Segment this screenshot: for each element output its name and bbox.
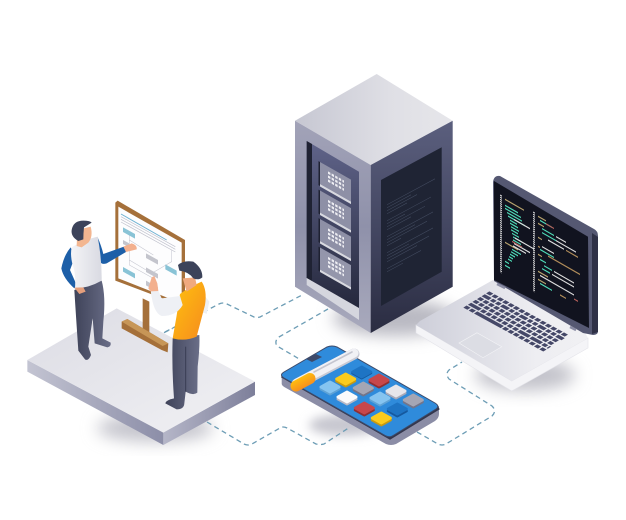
laptop lid (493, 176, 598, 335)
left person legs (74, 281, 111, 360)
right person hand (148, 276, 158, 291)
laptop hinges (497, 284, 576, 330)
server code panel (381, 147, 442, 306)
laptop base top (416, 280, 588, 381)
right person legs (165, 335, 199, 409)
rack sill (307, 278, 359, 320)
presentation board (115, 201, 185, 352)
server tower (295, 74, 453, 333)
laptop base edge (416, 325, 588, 391)
smartphone (282, 346, 439, 445)
laptop screen (494, 181, 589, 328)
right person shirt (173, 282, 206, 340)
right person hair (178, 261, 202, 279)
dashed connector lines (165, 294, 494, 445)
left person torso (71, 237, 102, 288)
board header lines (121, 214, 175, 252)
rack unit 2 (318, 190, 351, 233)
board frame (115, 201, 185, 307)
person right (148, 261, 209, 409)
left person head (77, 227, 92, 247)
right person neck (183, 277, 197, 292)
dashed line segment over platform (164, 328, 173, 333)
board flowchart (123, 227, 177, 292)
laptop (416, 176, 598, 391)
platform slab (27, 308, 255, 445)
phone speaker notch (306, 354, 322, 362)
laptop trackpad (459, 333, 502, 358)
app icons (321, 367, 422, 425)
rack unit 4 (318, 247, 351, 290)
board stand (143, 298, 149, 333)
rack unit 3 (318, 218, 351, 261)
left person sleeves (61, 247, 77, 288)
server right face (371, 121, 453, 333)
board sheet (118, 207, 182, 303)
rack unit 1 (318, 161, 351, 204)
platform with team and board (27, 201, 255, 445)
laptop keyboard (465, 292, 568, 351)
person left (61, 221, 137, 360)
shadows under the objects (97, 300, 575, 442)
server top face (295, 74, 453, 165)
right person paper (202, 293, 209, 314)
left person hand (123, 243, 137, 252)
phone capsule bar (296, 352, 354, 386)
phone screen (282, 346, 438, 437)
right person arm (151, 291, 183, 316)
phone body edge (282, 375, 439, 445)
server left face (295, 121, 371, 333)
code on laptop screen (501, 193, 580, 318)
server rack recess (307, 141, 359, 313)
